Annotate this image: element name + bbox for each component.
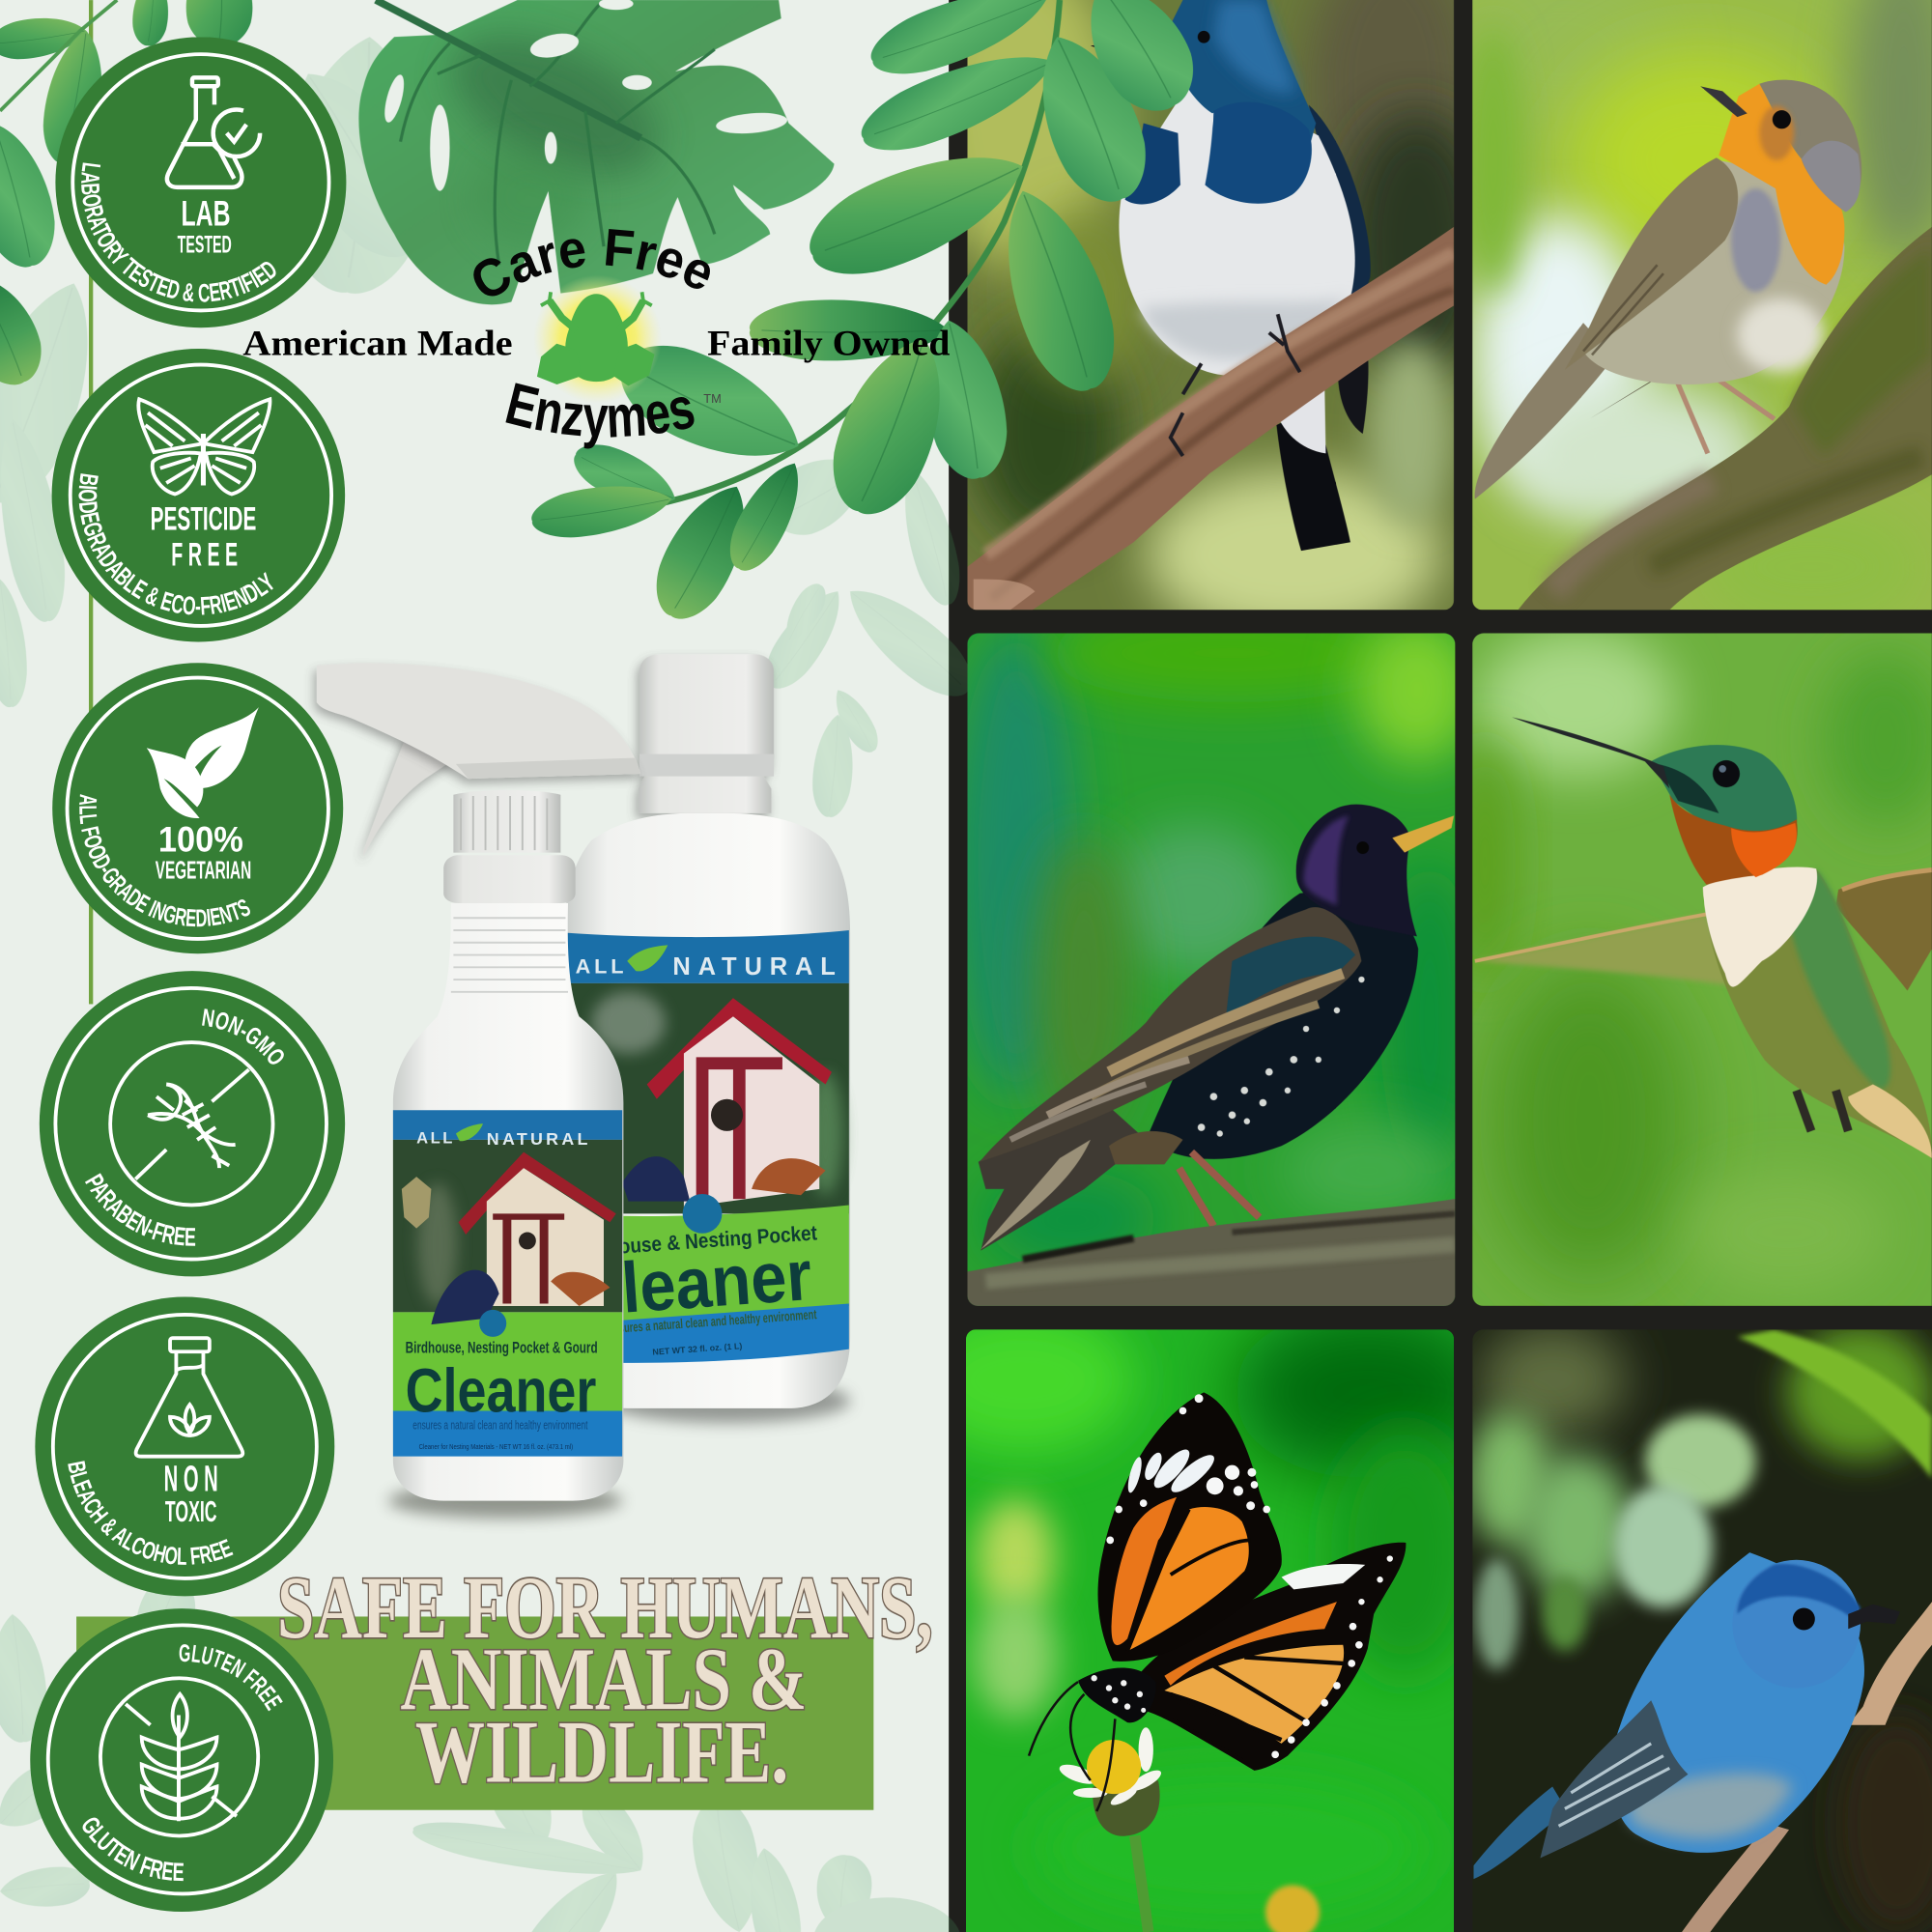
badge: pesticide free: BIODEGRADABLE & ECO-FRIENDLY <box>78 473 273 614</box>
head <box>1296 805 1417 936</box>
photo: robin on mossy branch <box>1454 0 1932 629</box>
badge: pesticide free: F R E E <box>171 536 238 573</box>
icon: flask with check <box>167 77 260 187</box>
badge: non toxic: TOXIC <box>165 1495 216 1528</box>
tail <box>1475 323 1614 499</box>
head <box>1651 745 1797 838</box>
headline banner <box>76 1616 873 1810</box>
body <box>1703 867 1932 1158</box>
body <box>1583 160 1844 384</box>
badge: 100% vegetarian: 100% <box>158 819 243 859</box>
icon: butterfly <box>138 399 270 494</box>
badge: lab tested: LAB <box>182 193 231 233</box>
wing <box>1565 157 1738 370</box>
badge: pesticide free <box>52 349 345 642</box>
badge: lab tested <box>55 37 346 327</box>
logo wordmark: Care Free <box>473 229 710 346</box>
tail <box>979 1084 1146 1251</box>
label birdhouse <box>647 998 832 1099</box>
orange breast <box>1719 84 1844 285</box>
tagline: Family Owned: Family Owned <box>707 323 951 362</box>
photo: monarch-like butterfly on flower <box>912 1306 1503 1932</box>
badge: non toxic: BLEACH & ALCOHOL FREE <box>62 1459 236 1571</box>
icon: wheat <box>142 1694 216 1821</box>
headline: Safe for humans, animals and wildlife <box>277 1558 933 1801</box>
tail <box>1474 1786 1567 1879</box>
headline: Safe for humans, animals and wildlife: WILDLIFE. <box>415 1702 788 1801</box>
foliage: stem with leaves around the logo and first photo <box>528 0 1211 632</box>
product: large refill bottle: ALL <box>576 954 627 979</box>
photo: blue flycatcher on twig <box>1466 1324 1932 1932</box>
spots <box>1198 977 1365 1137</box>
product: spray bottle: Birdhouse, Nesting Pocket & Gourd <box>406 1339 598 1357</box>
badge: 100% vegetarian <box>52 663 343 953</box>
left panel background <box>0 0 949 1932</box>
product: large refill bottle: Cleaner <box>573 1235 814 1331</box>
body <box>1078 1668 1156 1722</box>
logo glow <box>533 274 662 403</box>
wing <box>1540 1700 1688 1858</box>
photo: blue and white flycatcher on branch <box>968 0 1455 611</box>
badge: non toxic: N O N <box>164 1458 218 1499</box>
photo: starling on log <box>955 604 1479 1306</box>
wing <box>1308 104 1371 294</box>
body <box>1146 893 1418 1159</box>
product: spray bottle: NATURAL <box>487 1129 588 1149</box>
legs <box>1672 367 1775 453</box>
stem and flower <box>1135 1836 1149 1932</box>
product: large refill bottle: NET WT 32 fl. oz. (1 L) <box>652 1341 743 1357</box>
icon: frog <box>538 292 653 384</box>
product: spray bottle: ALL <box>416 1129 455 1148</box>
forewing <box>1098 1392 1282 1662</box>
faint background leaves <box>0 31 986 1932</box>
product: large refill bottle: NATURAL <box>672 953 836 980</box>
twig <box>1848 1602 1932 1725</box>
legs <box>1179 1152 1260 1226</box>
body <box>1119 74 1355 376</box>
label birdhouse <box>458 1152 616 1235</box>
body <box>1611 1552 1864 1853</box>
logo: Care Free Enzymes <box>461 216 724 450</box>
badge: gluten free <box>30 1608 333 1912</box>
badge: lab tested: LABORATORY TESTED & CERTIFIED <box>81 162 276 302</box>
badge: non-GMO paraben-free: PARABEN-FREE <box>79 1169 196 1252</box>
bark branch <box>967 227 1454 610</box>
product: spray bottle: Cleaner <box>406 1356 596 1426</box>
badge: 100% vegetarian: ALL FOOD-GRADE INGREDIENTS <box>73 793 254 932</box>
product: large refill bottle: Birdhouse & Nesting Pocket <box>570 1220 818 1262</box>
hindwing <box>1141 1543 1406 1771</box>
wing <box>980 907 1361 1162</box>
badge: gluten free: GLUTEN FREE <box>179 1640 287 1715</box>
head and back <box>1173 0 1316 141</box>
badge: 100% vegetarian: VEGETARIAN <box>156 857 251 884</box>
photo: ruby-throated hummingbird <box>1454 629 1932 1306</box>
product: spray bottle: ensures a natural clean and healthy environment <box>412 1418 588 1433</box>
dark photo grid background <box>949 0 1932 1932</box>
logo: Care Free Enzymes: TM <box>703 391 722 406</box>
headline: Safe for humans, animals and wildlife: ANIMALS & <box>401 1630 807 1728</box>
blurred left wing <box>1475 914 1731 985</box>
product: large refill bottle <box>564 654 850 1423</box>
tail feathers <box>1276 407 1350 551</box>
product: large refill bottle: Ensures a natural clean and healthy environment <box>607 1306 817 1336</box>
green accent line <box>89 0 93 1005</box>
tagline: American Made: American Made <box>242 323 513 362</box>
foliage: top-left leaves <box>0 0 252 396</box>
badge: gluten free: GLUTEN FREE <box>75 1811 185 1887</box>
badge: non toxic <box>35 1296 334 1596</box>
right wing <box>1836 868 1932 991</box>
product: spray bottle <box>317 663 640 1518</box>
badge: pesticide free: PESTICIDE <box>151 500 256 537</box>
badge: lab tested: TESTED <box>178 231 232 258</box>
badge: non-GMO paraben-free <box>40 971 345 1276</box>
icon: DNA helix <box>148 1084 236 1168</box>
icon: flask with leaves <box>136 1338 242 1457</box>
icon: two leaves <box>147 707 259 818</box>
badge: non-GMO paraben-free: NON-GMO <box>200 1005 290 1071</box>
headline: Safe for humans, animals and wildlife: SAFE FOR HUMANS, <box>277 1558 933 1657</box>
bud <box>1265 1886 1320 1932</box>
product: spray bottle: Cleaner for Nesting Materials - NET WT 16 fl. oz. (473.1 ml) <box>419 1442 573 1451</box>
head <box>1732 1560 1861 1688</box>
mossy branch <box>1518 227 1932 610</box>
log <box>967 1199 1455 1306</box>
head <box>1759 80 1861 212</box>
monstera leaf <box>358 0 835 304</box>
logo: Care Free Enzymes: Enzymes <box>505 383 694 448</box>
